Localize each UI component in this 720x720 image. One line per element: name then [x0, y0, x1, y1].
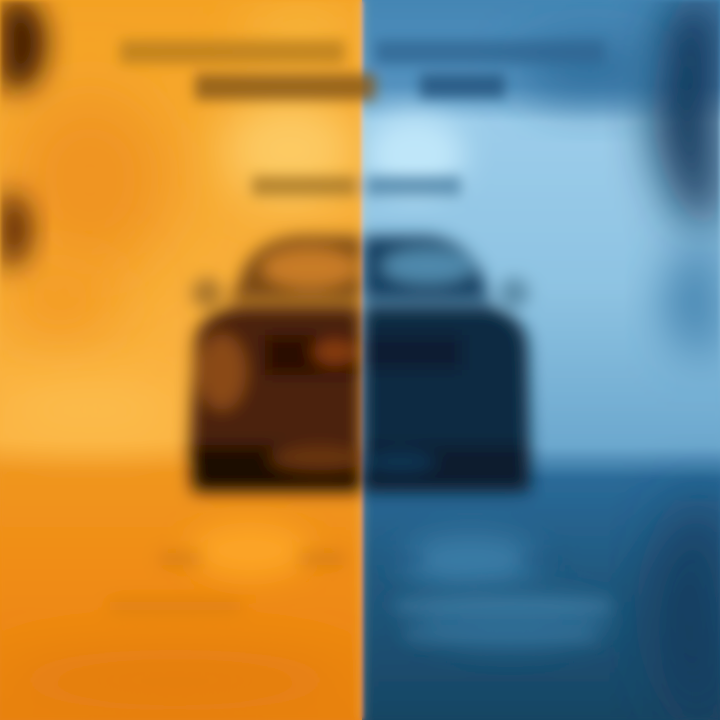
divider glow [358, 0, 366, 720]
icon: dark smoke top left [0, 0, 46, 88]
panel: blue right half [362, 0, 720, 720]
car right half [362, 236, 530, 492]
icon: dark smoke mid left [0, 194, 31, 266]
title: blurred headline [120, 40, 605, 100]
subtitle: blurred text [252, 176, 461, 196]
car illustration [190, 236, 530, 492]
caption: blurred bottom labels right [385, 552, 610, 640]
car left half [190, 236, 370, 492]
caption: blurred bottom labels left [110, 552, 345, 612]
panel: orange left half [0, 0, 362, 720]
